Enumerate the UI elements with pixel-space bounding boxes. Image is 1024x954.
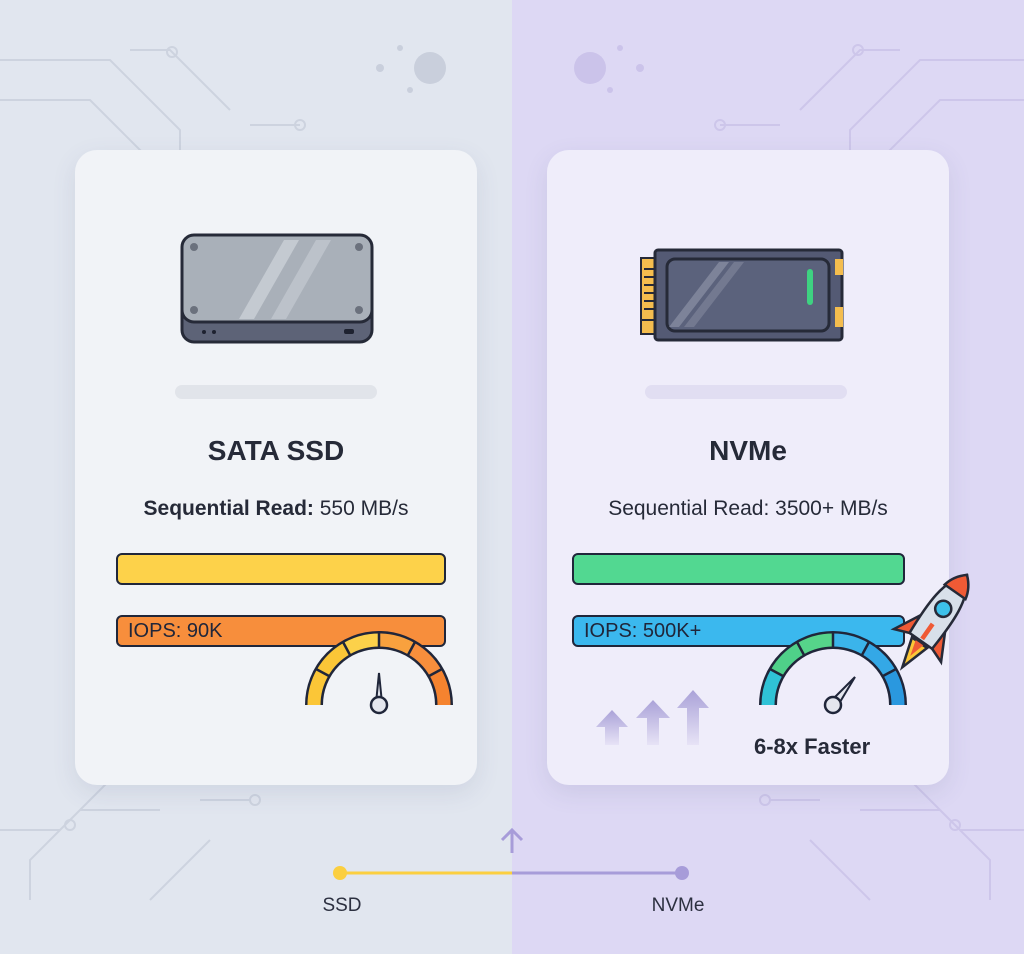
panel: SATA SSD [75, 150, 477, 785]
bar: IOPS: IOPS: 90K [128, 620, 222, 642]
arrow up [502, 830, 522, 853]
gauge [759, 631, 907, 714]
timeline: SSD to NVMe: NVMe [652, 895, 704, 916]
icon: NVMe drive [640, 248, 844, 342]
shadow [175, 385, 377, 399]
icon: rocket [890, 573, 970, 671]
text: sequential read: Sequential Read: 3500+ MB/s [608, 497, 888, 520]
shadow [645, 385, 847, 399]
icon: arrows up [596, 690, 709, 745]
timeline: SSD to NVMe [322, 828, 704, 916]
heading: NVMe [709, 435, 787, 466]
bar: sequential read [116, 553, 446, 585]
bar: IOPS [116, 615, 446, 647]
bar: sequential read [572, 553, 905, 585]
bar: IOPS [572, 615, 905, 647]
icon: SATA drive [180, 234, 374, 344]
text: sequential read: Sequential Read: 550 MB/s [144, 497, 408, 520]
text: 6-8x Faster: 6-8x Faster [754, 734, 870, 759]
heading: SATA SSD [208, 435, 344, 466]
gauge [305, 631, 453, 714]
background right half [512, 0, 1024, 954]
timeline: SSD to NVMe: SSD [322, 895, 362, 916]
bar: IOPS: IOPS: 500K+ [584, 620, 701, 642]
panel: NVMe [547, 150, 949, 785]
